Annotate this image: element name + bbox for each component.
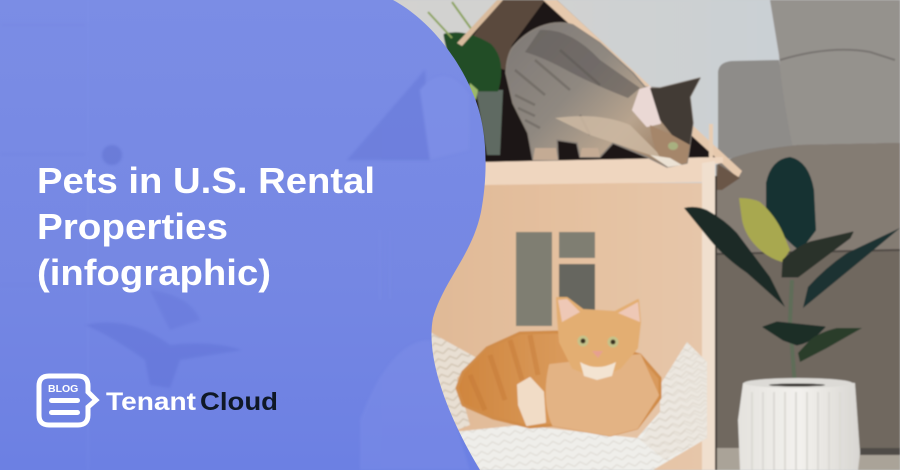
- title: Pets in U.S. Rental: [37, 160, 375, 201]
- sofa seat: [716, 143, 900, 448]
- title: Properties: [37, 206, 228, 247]
- house roof interior: [457, 0, 742, 172]
- panel: blue wave overlay: [0, 0, 486, 470]
- logo: blog icon and TenantCloud wordmark: [39, 376, 278, 425]
- sofa back cushions: [718, 0, 900, 160]
- house body: [430, 183, 702, 470]
- tabby cat: [506, 23, 700, 167]
- faint room details under overlay: [91, 74, 428, 386]
- rubber plant: [684, 158, 900, 387]
- house shelf: [484, 157, 723, 185]
- icon: blog speech bubble: [39, 376, 96, 425]
- ribbed pot: [738, 378, 860, 470]
- window: [516, 232, 595, 326]
- wordmark: Tenant: Tenant: [106, 388, 197, 416]
- house right wall: [702, 161, 715, 470]
- title: (infographic): [37, 252, 271, 293]
- small plant in pot: [428, 2, 503, 155]
- roof edges: [543, 0, 742, 178]
- ginger cat: [457, 298, 660, 435]
- wordmark: Cloud: Cloud: [200, 388, 278, 416]
- icon: blog speech bubble: BLOG: [48, 383, 78, 395]
- floor: [716, 448, 900, 470]
- bed cushion: [430, 332, 707, 470]
